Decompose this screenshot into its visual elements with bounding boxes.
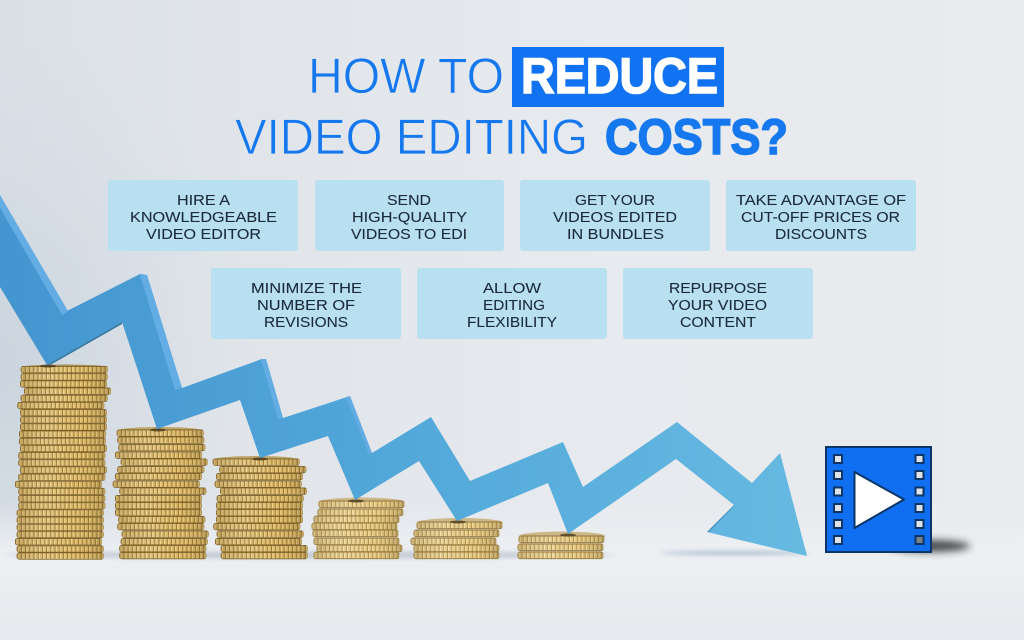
arrow: falling cost trend xyxy=(0,195,807,556)
panel: repurpose video content: YOUR VIDEO xyxy=(668,297,767,314)
panel: minimize revisions: REVISIONS xyxy=(264,314,348,331)
coin stack 2 xyxy=(113,427,209,559)
panel: get videos edited in bundles xyxy=(520,180,710,251)
coin stack 6 xyxy=(518,532,605,559)
panel: allow editing flexibility xyxy=(417,268,607,339)
heading line 1: how to: HOW TO xyxy=(308,48,504,104)
panel: allow editing flexibility: EDITING xyxy=(483,297,545,314)
panel: cut-off prices or discounts: DISCOUNTS xyxy=(775,226,867,243)
panel: repurpose video content: CONTENT xyxy=(680,314,756,331)
panel: minimize revisions: NUMBER OF xyxy=(257,297,355,314)
panel: send high-quality videos: SEND xyxy=(387,192,431,209)
coin stack 5 xyxy=(410,518,503,559)
coin stack 1 xyxy=(15,364,111,560)
panel: get videos edited in bundles: VIDEOS EDITED xyxy=(553,209,677,226)
panel: cut-off prices or discounts xyxy=(726,180,916,251)
panel: repurpose video content: REPURPOSE xyxy=(669,280,767,297)
panel: hire a knowledgeable video editor: VIDEO EDITOR xyxy=(146,226,261,243)
panel: allow editing flexibility: FLEXIBILITY xyxy=(467,314,557,331)
panel: cut-off prices or discounts: CUT-OFF PRICES OR xyxy=(741,209,900,226)
panel: hire a knowledgeable video editor: HIRE A xyxy=(177,192,230,209)
panel: allow editing flexibility: ALLOW xyxy=(483,280,542,297)
ground shadows xyxy=(5,540,970,558)
panel: send high-quality videos: VIDEOS TO EDI xyxy=(351,226,467,243)
contact shadows under arrow tips xyxy=(40,364,576,536)
heading line 2: video editing: VIDEO EDITING xyxy=(235,109,588,165)
panel: get videos edited in bundles: GET YOUR xyxy=(575,192,655,209)
coin stack 4 xyxy=(312,498,404,559)
title xyxy=(235,47,788,165)
panel: cut-off prices or discounts: TAKE ADVANTAGE OF xyxy=(736,192,906,209)
panel: send high-quality videos xyxy=(315,180,504,251)
coin stack 3 xyxy=(212,456,308,559)
panel: send high-quality videos: HIGH-QUALITY xyxy=(352,209,467,226)
panel: hire a knowledgeable video editor xyxy=(108,180,298,251)
panel: repurpose video content xyxy=(623,268,813,339)
bold word: costs: COSTS? xyxy=(605,109,788,165)
panel: get videos edited in bundles: IN BUNDLES xyxy=(567,226,664,243)
highlight box xyxy=(512,47,724,107)
panel: minimize revisions: MINIMIZE THE xyxy=(251,280,362,297)
highlighted word: reduce: REDUCE xyxy=(521,48,718,104)
panel: minimize revisions xyxy=(211,268,401,339)
icon: video file xyxy=(826,447,931,552)
panel: hire a knowledgeable video editor: KNOWLEDGEABLE xyxy=(130,209,277,226)
